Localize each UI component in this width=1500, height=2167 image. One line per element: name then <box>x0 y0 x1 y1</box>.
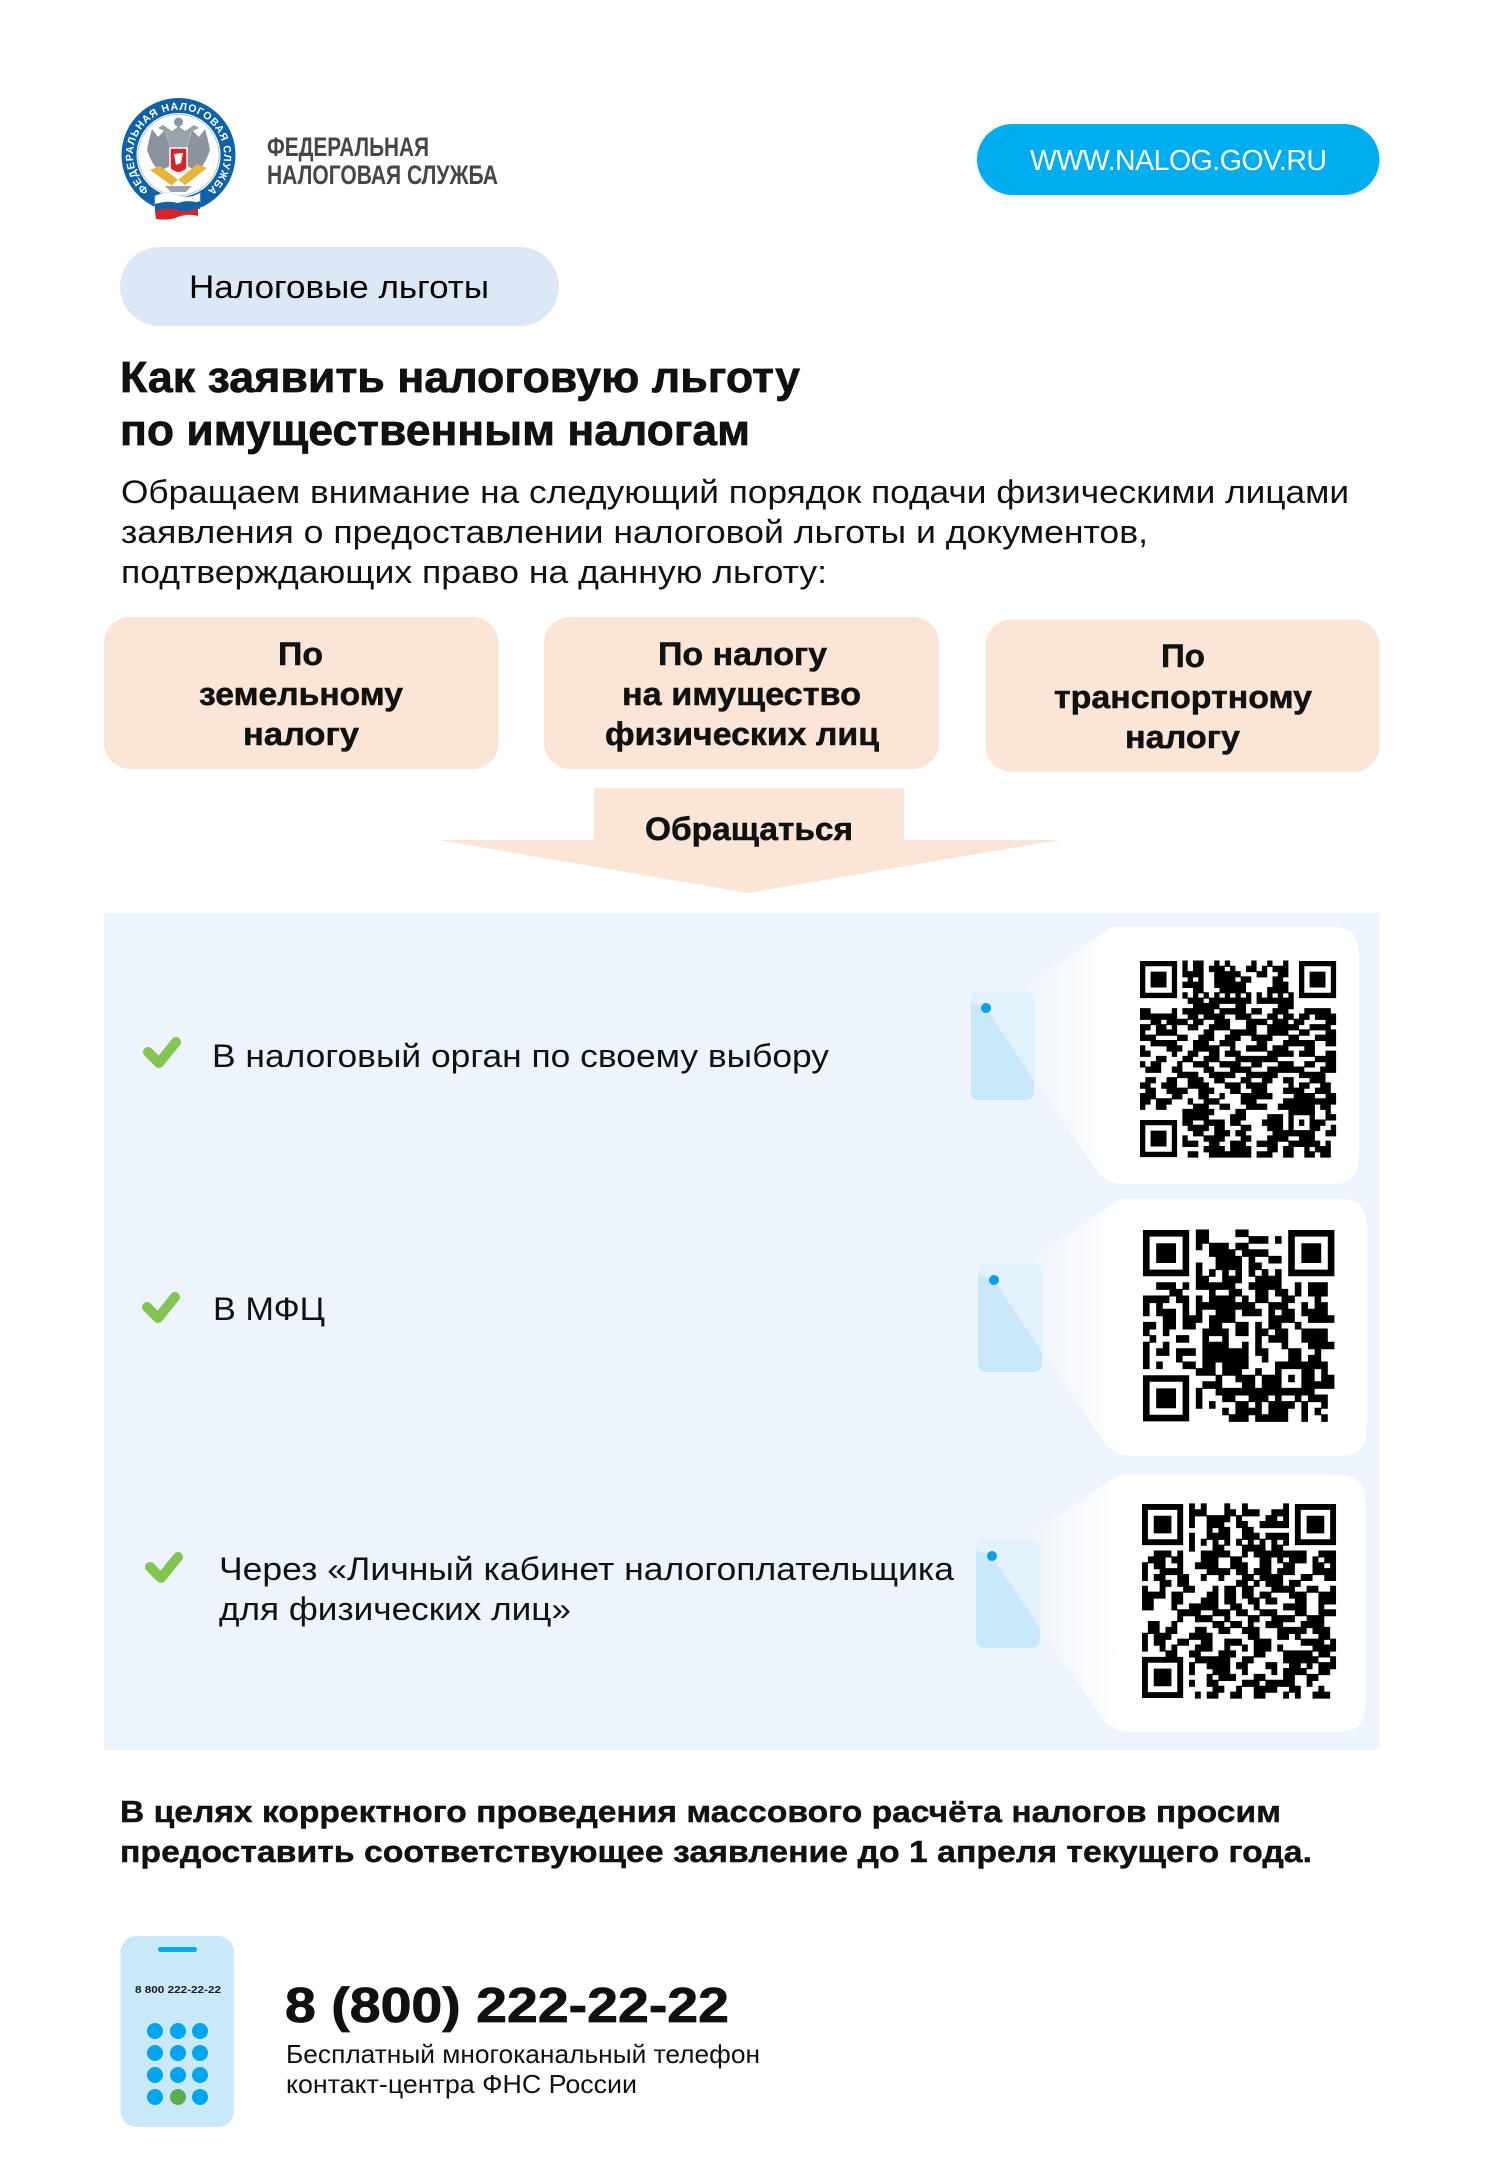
panel: land tax: По <box>278 636 323 672</box>
title: по имущественным налогам <box>120 406 750 455</box>
hotline description: контакт-центра ФНС России <box>286 2069 637 2099</box>
item: personal account: Через «Личный кабинет налогоплательщика <box>219 1551 954 1587</box>
item: MFC <box>147 1291 325 1327</box>
panel: property tax: физических лиц <box>605 716 879 752</box>
hotline description <box>286 2039 760 2099</box>
logo wordmark: ФЕДЕРАЛЬНАЯ <box>267 132 429 162</box>
panel: land tax <box>104 617 498 769</box>
panel: property tax: По налогу <box>658 636 827 672</box>
panel: transport tax: транспортному <box>1054 679 1312 715</box>
category pill: Налоговые льготы <box>189 269 489 305</box>
item: tax office: В налоговый орган по своему выбору <box>212 1038 829 1074</box>
panel: transport tax <box>986 620 1380 772</box>
deadline notice: предоставить соответствующее заявление до 1 апреля текущего года. <box>120 1834 1312 1869</box>
panel: property tax <box>544 617 939 769</box>
intro paragraph: Обращаем внимание на следующий порядок подачи физическими лицами <box>121 474 1349 510</box>
logo wordmark <box>267 132 498 190</box>
QR callout 3 <box>976 1475 1365 1732</box>
icon: phone keypad: 8 800 222-22-22 <box>135 1984 221 1996</box>
website button: WWW.NALOG.GOV.RU <box>1030 145 1327 177</box>
category pill <box>120 247 559 326</box>
item: MFC: В МФЦ <box>213 1291 325 1327</box>
hotline number: 8 (800) 222-22-22 <box>285 1979 729 2033</box>
panel: where to apply <box>104 913 1380 1750</box>
website button <box>977 124 1380 195</box>
panel: transport tax: налогу <box>1125 719 1240 755</box>
logo wordmark: НАЛОГОВАЯ СЛУЖБА <box>267 160 498 190</box>
hotline description: Бесплатный многоканальный телефон <box>286 2039 760 2069</box>
panel: land tax: налогу <box>243 716 359 752</box>
arrow: apply: Обращаться <box>645 811 853 847</box>
arrow: apply <box>439 788 1060 893</box>
title: Как заявить налоговую льготу <box>120 353 801 402</box>
item: personal account <box>150 1551 954 1627</box>
intro paragraph: заявления о предоставлении налоговой льготы и документов, <box>121 514 1148 550</box>
logo: Federal Tax Service emblem: ФЕДЕРАЛЬНАЯ НАЛОГОВАЯ СЛУЖБА <box>126 102 232 194</box>
title <box>120 353 801 455</box>
item: personal account: для физических лиц» <box>219 1591 571 1627</box>
panel: transport tax: По <box>1161 638 1205 674</box>
intro paragraph: подтверждающих право на данную льготу: <box>121 554 827 590</box>
icon: phone keypad <box>120 1936 234 2127</box>
QR callout 1 <box>971 927 1359 1184</box>
panel: land tax: земельному <box>199 676 403 712</box>
deadline notice: В целях корректного проведения массового расчёта налогов просим <box>120 1794 1281 1829</box>
intro paragraph <box>121 474 1349 590</box>
QR callout 2 <box>978 1199 1367 1456</box>
deadline notice <box>120 1794 1312 1869</box>
panel: property tax: на имущество <box>622 676 861 712</box>
